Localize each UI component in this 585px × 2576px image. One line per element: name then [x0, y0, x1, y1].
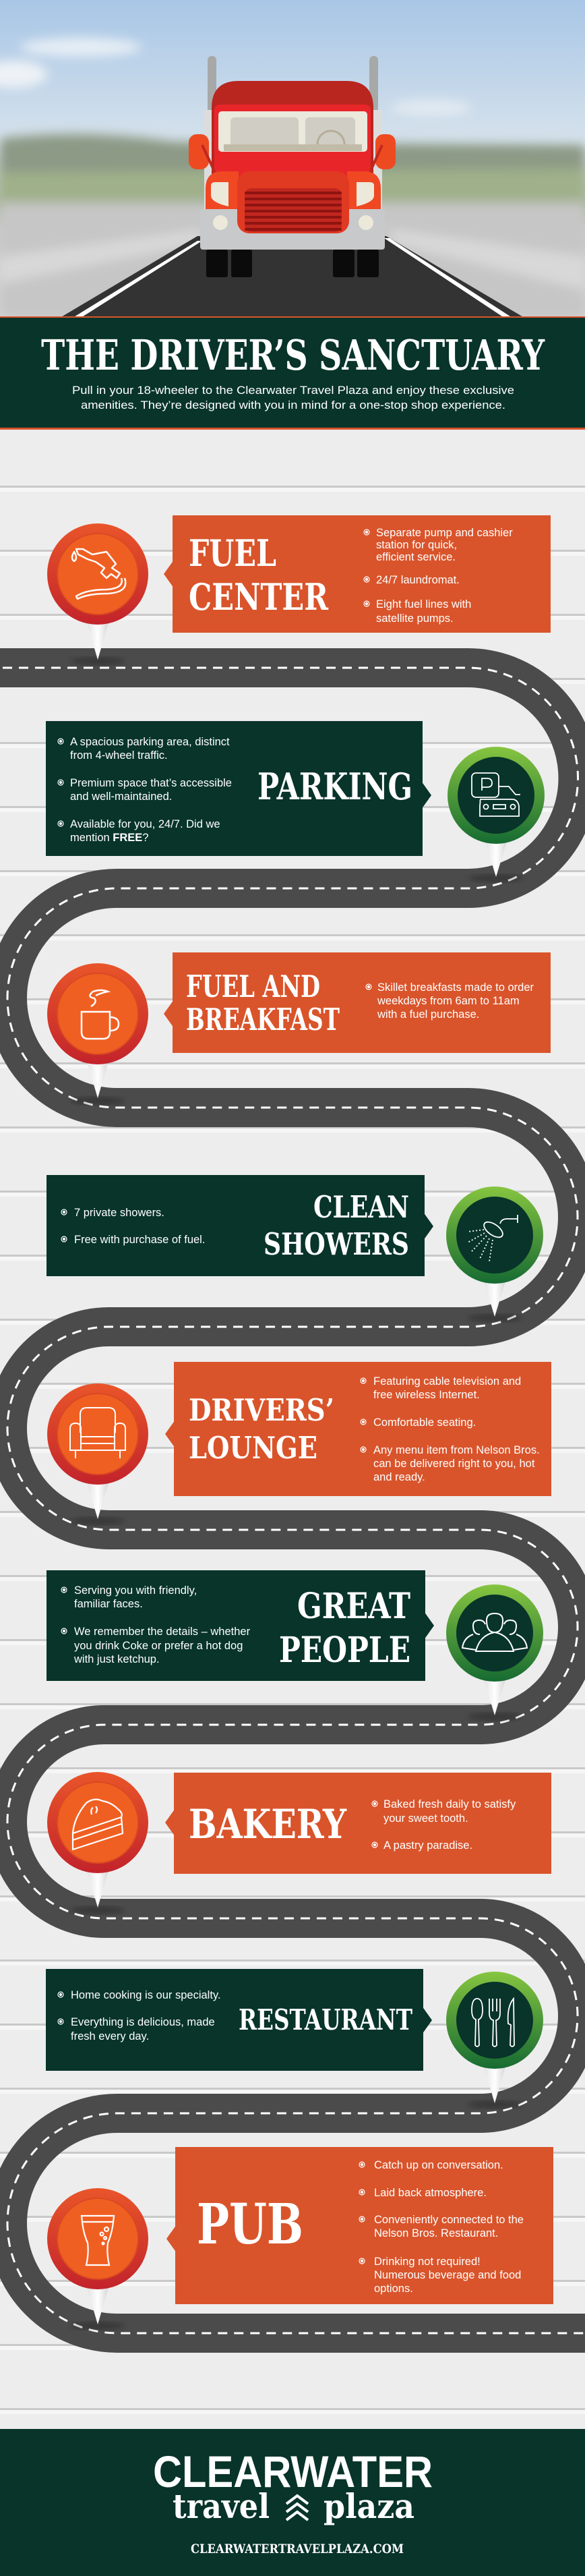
pin: pub — [47, 2188, 148, 2330]
bullets: pub: Numerous beverage and food — [374, 2269, 521, 2281]
logo: travel plaza — [173, 2486, 414, 2526]
logo: travel plaza: plaza — [324, 2486, 414, 2526]
bullets: lounge: can be delivered right to you, hot — [373, 1458, 535, 1470]
bullets: parking: Premium space that’s accessible — [70, 777, 232, 789]
winding road — [0, 668, 585, 2333]
bullets: fuel center: efficient service. — [376, 551, 456, 563]
box: drivers' lounge: DRIVERS’ — [189, 1392, 334, 1428]
bullets: bakery: your sweet tooth. — [383, 1812, 468, 1825]
box: bakery: BAKERY — [189, 1801, 347, 1848]
pin: great people — [446, 1584, 543, 1721]
bullets: pub — [359, 2159, 524, 2295]
pin: fuel center — [47, 523, 148, 665]
bullets: pub: Catch up on conversation. — [374, 2159, 503, 2171]
box: fuel and breakfast: BREAKFAST — [186, 1002, 340, 1037]
bullets: restaurant: fresh every day. — [71, 2030, 149, 2042]
bullets: lounge: free wireless Internet. — [373, 1389, 480, 1401]
bullets: fuel center: Eight fuel lines with — [376, 598, 471, 610]
bullets: parking: mention FREE? — [70, 832, 148, 844]
icon: parking — [472, 773, 520, 816]
bullets: fuel center: satellite pumps. — [376, 612, 454, 625]
bullets: bakery: Baked fresh daily to satisfy — [383, 1798, 516, 1810]
panel: bakery — [47, 1772, 551, 1914]
panel: fuel center — [47, 515, 551, 665]
box: great people — [47, 1570, 434, 1681]
bullets: fuel center: station for quick, — [376, 539, 457, 551]
bullets: bakery — [372, 1798, 516, 1852]
bullets: parking: from 4-wheel traffic. — [70, 749, 168, 762]
pin: lounge — [47, 1383, 148, 1525]
bullets: showers — [61, 1207, 205, 1246]
bullets: breakfast: Skillet breakfasts made to order — [377, 981, 534, 994]
bullets: breakfast — [366, 981, 534, 1021]
bullets: lounge: and ready. — [373, 1471, 425, 1483]
bullets: breakfast: with a fuel purchase. — [377, 1008, 479, 1021]
logo: travel plaza: travel — [173, 2486, 270, 2526]
box: parking — [46, 721, 431, 856]
pin: parking — [448, 747, 545, 882]
bullets: fuel center: Separate pump and cashier — [376, 527, 513, 539]
bullets: bakery: A pastry paradise. — [383, 1839, 472, 1852]
box: clean showers: CLEAN — [313, 1189, 409, 1225]
box: pub: PUB — [197, 2192, 303, 2257]
box: pub — [166, 2147, 553, 2304]
pin: showers — [446, 1186, 543, 1322]
box: drivers' lounge — [165, 1362, 551, 1496]
bullets: breakfast: weekdays from 6am to 11am — [377, 995, 520, 1007]
box: bakery — [165, 1773, 551, 1874]
box: fuel and breakfast — [164, 952, 551, 1053]
bullets: parking — [58, 736, 232, 844]
bullets: great people: with just ketchup. — [73, 1653, 160, 1665]
box: fuel center — [164, 515, 551, 633]
bullets: fuel center — [364, 527, 513, 625]
box: parking: PARKING — [257, 765, 412, 808]
header banner — [0, 316, 585, 430]
intro text: Pull in your 18-wheeler to the Clearwater Travel Plaza and enjoy these exclusive — [72, 384, 514, 397]
panel: restaurant — [46, 1969, 543, 2109]
truck — [189, 56, 396, 277]
intro text: amenities. They’re designed with you in mind for a one-stop shop experience. — [81, 399, 505, 411]
background: wood planks — [0, 428, 585, 2429]
website url: CLEARWATERTRAVELPLAZA.COM — [191, 2542, 404, 2556]
bullets: great people: familiar faces. — [74, 1598, 143, 1610]
box: fuel and breakfast: FUEL AND — [186, 969, 320, 1004]
bullets: lounge: Any menu item from Nelson Bros. — [373, 1444, 540, 1456]
bullets: pub: Laid back atmosphere. — [374, 2187, 487, 2199]
bullets: showers: Free with purchase of fuel. — [74, 1234, 205, 1246]
footer — [0, 2429, 585, 2576]
icon: people — [462, 1613, 527, 1651]
bullets: lounge: Comfortable seating. — [373, 1416, 476, 1429]
panel: fuel and breakfast — [47, 952, 551, 1105]
icon: fuel nozzle — [72, 549, 125, 599]
icon: utensils — [472, 1999, 514, 2047]
box: great people: GREAT — [297, 1586, 410, 1627]
box: restaurant: RESTAURANT — [239, 2003, 412, 2036]
bullets: showers: 7 private showers. — [74, 1207, 164, 1219]
pin: bakery — [47, 1772, 148, 1914]
panel: clean showers — [47, 1175, 543, 1322]
icon: pie slice — [73, 1800, 123, 1850]
bullets: pub: options. — [374, 2283, 413, 2295]
pin: breakfast — [47, 963, 148, 1105]
pin: restaurant — [446, 1972, 543, 2109]
panel: parking — [46, 721, 545, 882]
bullets: great people: We remember the details – whether — [74, 1626, 251, 1638]
icon: coffee cup — [82, 990, 119, 1039]
logo: clearwater: CLEARWATER — [153, 2446, 433, 2496]
bullets: restaurant: Home cooking is our specialty. — [71, 1989, 221, 2001]
bullets: parking: and well-maintained. — [70, 791, 172, 803]
bullets: lounge: Featuring cable television and — [373, 1375, 521, 1387]
icon: shower head — [468, 1215, 518, 1261]
panel: drivers' lounge — [47, 1362, 551, 1525]
box: drivers' lounge: LOUNGE — [189, 1430, 317, 1466]
bullets: lounge — [361, 1375, 540, 1483]
box: fuel center: CENTER — [189, 575, 329, 619]
bullets: parking: A spacious parking area, distinct — [70, 736, 230, 748]
bullets: great people: Serving you with friendly, — [74, 1584, 197, 1597]
bullets: great people: you drink Coke or prefer a hot dog — [74, 1640, 243, 1652]
bullets: great people — [61, 1584, 251, 1665]
box: fuel center: FUEL — [189, 532, 276, 575]
box: restaurant — [46, 1969, 432, 2071]
bullets: restaurant: Everything is delicious, made — [71, 2016, 215, 2028]
bullets: pub: Nelson Bros. Restaurant. — [374, 2227, 498, 2239]
icon: armchair — [70, 1408, 125, 1458]
bullets: pub: Conveniently connected to the — [374, 2214, 524, 2226]
bullets: pub: Drinking not required! — [374, 2256, 481, 2268]
box: clean showers: SHOWERS — [264, 1226, 409, 1262]
panel: great people — [47, 1570, 543, 1721]
panel: pub — [47, 2147, 553, 2330]
box: great people: PEOPLE — [279, 1630, 410, 1671]
bullets: parking: Available for you, 24/7. Did we — [70, 818, 220, 830]
box: clean showers — [47, 1175, 433, 1276]
intro text — [72, 384, 514, 411]
bullets: fuel center: 24/7 laundromat. — [376, 574, 460, 586]
bullets: restaurant — [58, 1989, 221, 2042]
hero: truck on highway — [0, 0, 585, 318]
road — [60, 236, 524, 318]
icon: beer glass — [82, 2216, 114, 2265]
